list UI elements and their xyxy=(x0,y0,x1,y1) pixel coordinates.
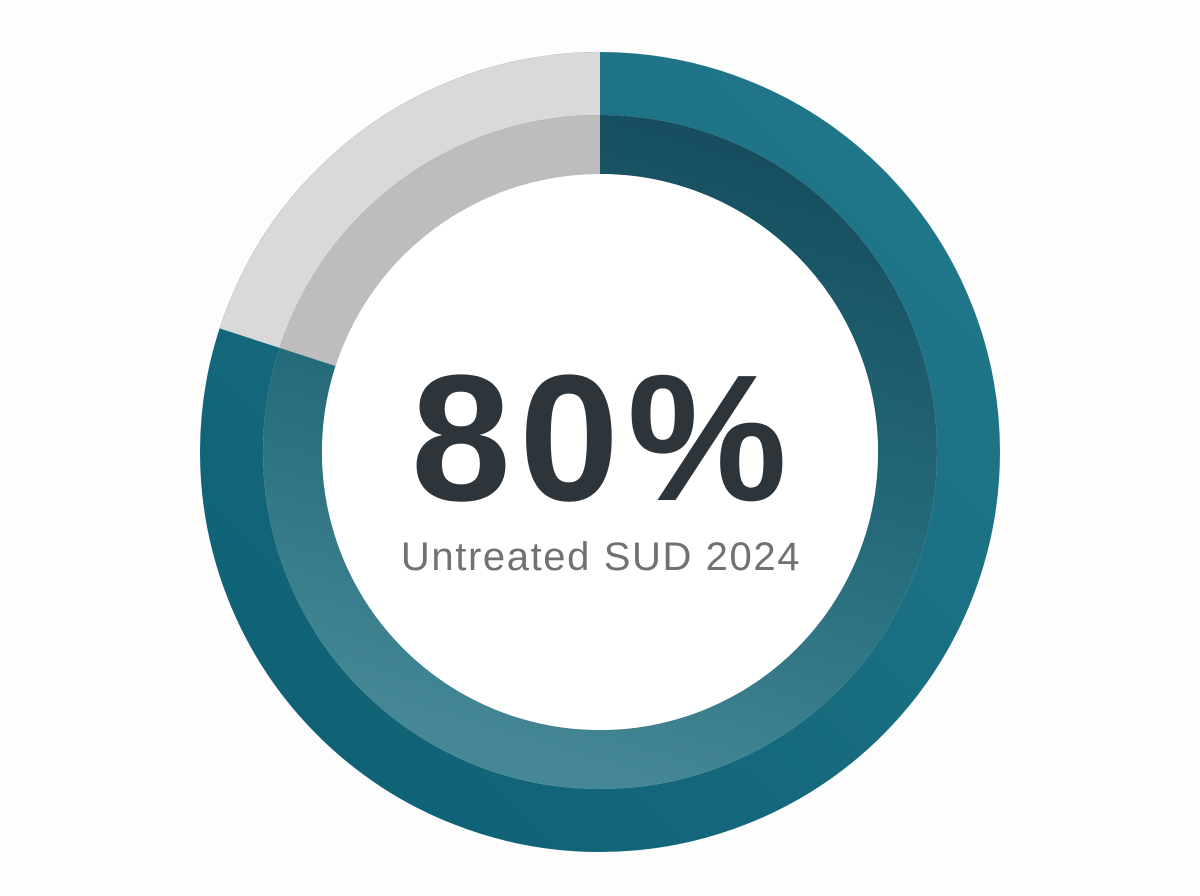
big number: 80% xyxy=(411,338,795,539)
ring segment: untreated 80% teal xyxy=(232,84,968,820)
ring segment: 20% gray xyxy=(220,52,600,366)
subtitle label: Untreated SUD 2024 xyxy=(401,535,801,579)
donut ring: treated/untreated xyxy=(220,52,969,820)
